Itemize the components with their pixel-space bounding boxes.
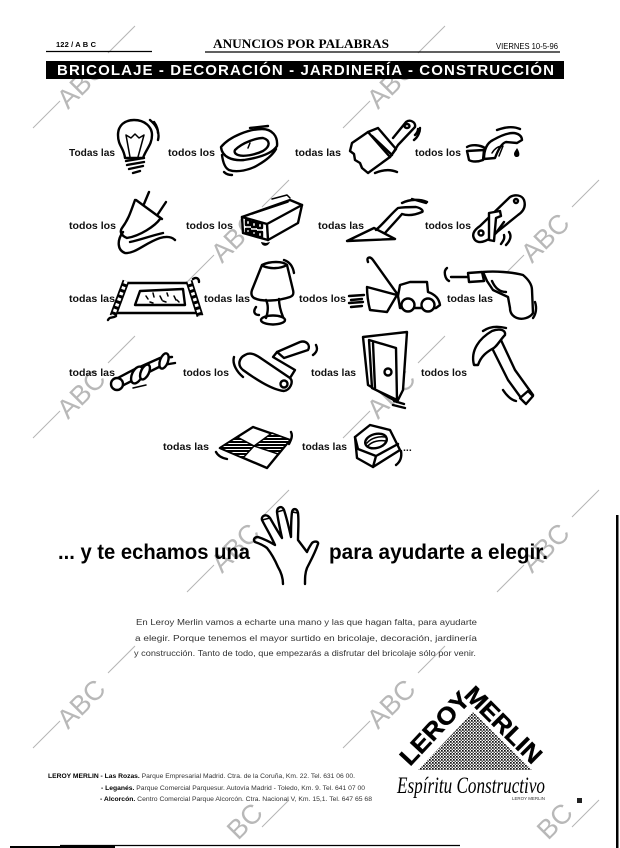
label: Todas las [69,147,115,159]
icon: light bulb [118,120,159,173]
watermark ABC: ABC [51,364,112,424]
watermark ABC: ABC [515,518,576,578]
watermark ABC [33,646,135,748]
label: todos los [425,220,471,232]
icon: paint roller [234,342,317,391]
icon: hinge [473,195,525,245]
store addresses [48,773,373,803]
label: todos los [168,147,215,159]
watermark ABC, cropped by the page edge: BC [531,798,579,845]
small square mark [577,798,582,803]
watermark ABC [343,26,445,128]
watermark ABC: ABC [515,208,576,268]
body paragraph [134,617,477,658]
label: todas las [204,293,250,305]
icon: power drill [445,268,536,319]
section title: ANUNCIOS POR PALABRAS [213,36,389,51]
watermark ABC, cropped by the page edge: BC [221,798,269,845]
body paragraph: a elegir. Porque tenemos el mayor surtido en bricolaje, decoración, jardinería [135,633,477,643]
header rule [46,50,560,53]
icon: electric plug [119,192,175,253]
page number: 122 / A B C [56,40,97,49]
icon: hex nut [355,425,401,467]
label: todos los [183,367,229,379]
icon: fringed rug [108,278,200,320]
logo wordmark left: LEROY [395,687,476,771]
label: todas las [302,441,347,453]
label: todas las [295,147,341,159]
label: todas las [318,220,364,232]
logo: Leroy Merlin [395,681,547,801]
label: todos los [69,220,116,232]
store addresses: - Alcorcón. Centro Comercial Parque Alcorcón. Ctra. Nacional V, Km. 15,1. Tel. 647 65 68 [100,796,373,803]
icon: lawn mower [349,258,440,312]
label: todos los [415,147,461,159]
icon: door [363,332,407,408]
watermark ABC: ABC [205,518,266,578]
label: todos los [186,220,233,232]
icon: hammer [473,327,533,404]
icon: trowel [347,199,427,241]
watermark ABC [187,490,289,592]
slogan right: para ayudarte a elegir. [329,541,548,564]
icon: pipe fitting [111,352,175,390]
logo wordmark right: MERLIN [459,681,547,770]
body paragraph: y construcción. Tanto de todo, que empezarás a disfrutar del bricolaje sólo por venir. [134,648,476,658]
watermark ABC: ABC [205,208,266,268]
label: todas las [447,293,493,305]
watermark ABC: ABC [51,54,112,114]
store addresses: LEROY MERLIN - Las Rozas. Parque Empresarial Madrid. Ctra. de la Coruña, Km. 22. Tel. 631 06 00. [48,773,355,780]
icon: hollow brick [242,195,302,246]
logo triangle [418,712,532,770]
ellipsis: ... [403,442,412,454]
label: todas las [69,367,115,379]
right edge rule [616,515,618,848]
page header [46,36,560,52]
watermark ABC [497,180,599,282]
store addresses: - Leganés. Parque Comercial Parquesur. Autovía Madrid - Toledo, Km. 9. Tel. 641 07 00 [101,785,366,792]
date: VIERNES 10-5-96 [496,42,559,51]
watermark ABC [33,336,135,438]
black category banner: BRICOLAJE - DECORACIÓN - JARDINERÍA - CONSTRUCCIÓN [57,61,554,79]
icon: floor tiles [216,427,292,468]
label: todas las [311,367,356,379]
label: todas las [163,441,209,453]
watermark ABC [187,180,289,282]
watermark ABC [33,26,135,128]
icon: open hand [254,507,318,584]
logo tagline: Espíritu Constructivo [396,772,545,798]
bottom rule [10,846,460,848]
watermark ABC [343,646,445,748]
icon: table lamp [251,260,294,324]
logo small print: LEROY MERLIN [512,796,545,801]
label: todos los [299,293,346,305]
watermark ABC [497,490,599,592]
watermark ABC: ABC [51,674,112,734]
watermark ABC: ABC [361,54,422,114]
label: todos los [421,367,467,379]
slogan left: ... y te echamos una [58,541,250,564]
watermark ABC: ABC [361,364,422,424]
icon: wash basin [221,126,277,175]
icon: faucet [467,127,522,162]
body paragraph: En Leroy Merlin vamos a echarte una mano y las que hagan falta, para ayudarte [136,617,477,627]
label: todas las [69,293,115,305]
watermark ABC [343,336,445,438]
icon: paint brush [350,121,420,173]
watermark ABC: ABC [361,674,422,734]
